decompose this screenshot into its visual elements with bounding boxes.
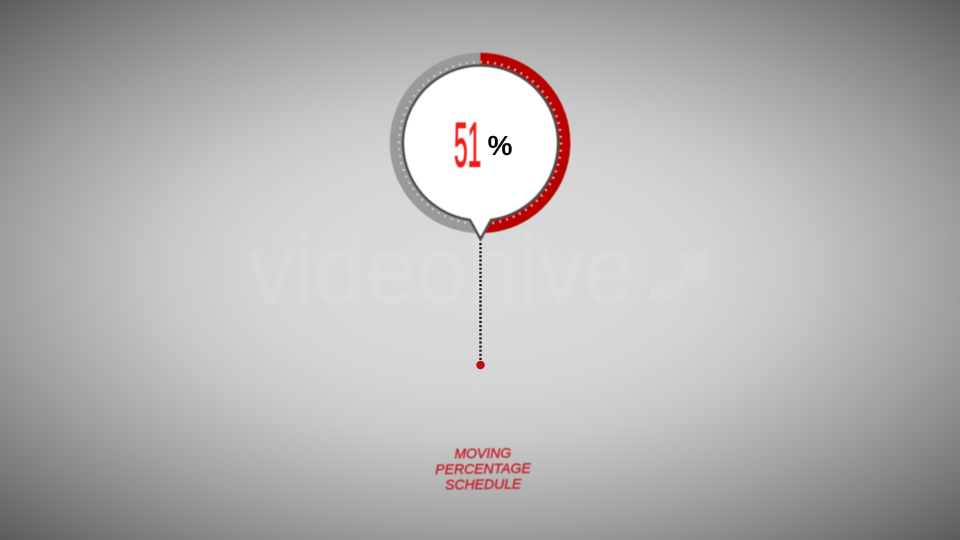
callout bubble: [403, 66, 558, 239]
dotted leader line: [479, 243, 482, 361]
value 51: 51: [454, 111, 481, 181]
caption: MOVING: [454, 445, 511, 461]
ring track: [396, 59, 564, 227]
caption: [435, 444, 532, 493]
percentage dial: [396, 59, 564, 239]
tick marks: [399, 62, 561, 224]
percent sign: %: [488, 130, 513, 161]
caption: SCHEDULE: [445, 475, 522, 493]
ring progress 51%: [476, 59, 564, 227]
watermark: videohive: [248, 214, 635, 324]
end dot: [476, 361, 485, 369]
caption: PERCENTAGE: [435, 460, 531, 477]
